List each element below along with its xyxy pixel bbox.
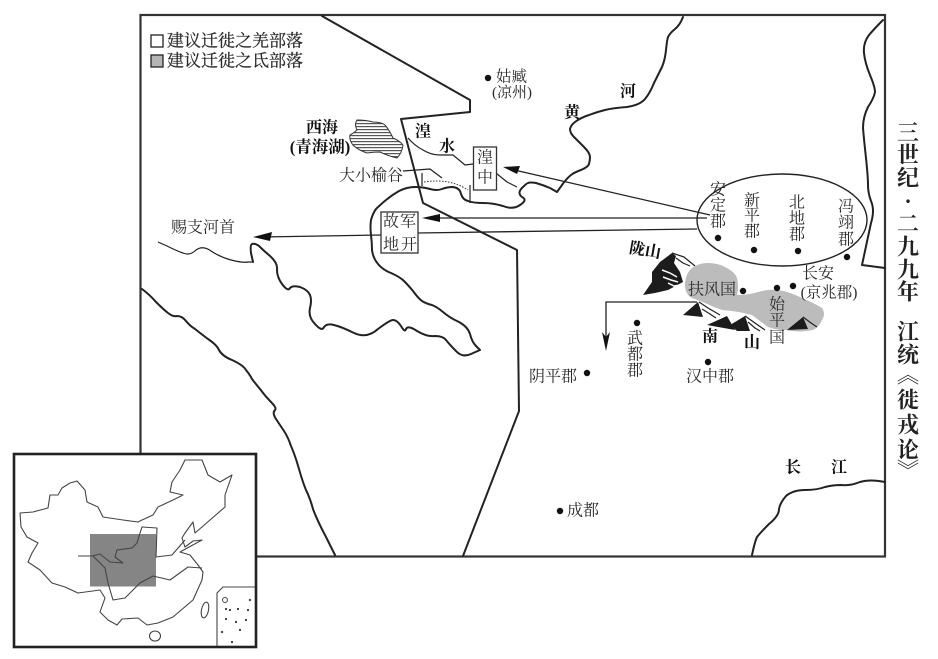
label: Fengyi: 郡 xyxy=(838,230,854,248)
China outline xyxy=(20,460,232,625)
label: Anding: 安 xyxy=(710,180,726,198)
side title: 纪 xyxy=(897,166,919,190)
label: Changan: 长安 xyxy=(802,264,834,282)
label: Shiping: 国 xyxy=(769,328,785,346)
label: Wudu xyxy=(627,320,643,380)
lake: Qinghai xyxy=(350,120,403,158)
label: Xinping xyxy=(744,192,760,253)
valley markers: Dayu Xiaoyu xyxy=(403,169,470,203)
label: Huang shui xyxy=(415,122,455,156)
label: Yangtze: 长 xyxy=(785,458,801,476)
side title: 世 xyxy=(897,142,919,168)
arrow: to Gu Junkai xyxy=(422,214,707,222)
label: Fufeng: 扶风国 xyxy=(688,280,736,298)
label: Guzang: 姑臧 xyxy=(496,68,528,86)
label: Xihai: (青海湖) xyxy=(290,136,350,156)
label: Nan Shan xyxy=(702,328,760,352)
label: Beidi: 地 xyxy=(789,208,805,228)
side title: 戎 xyxy=(897,412,919,438)
label: Nan Shan: 山 xyxy=(744,334,760,352)
arrow: to Cizhi river head xyxy=(253,229,697,241)
side title: 论 xyxy=(897,438,919,462)
label: Wudu: 郡 xyxy=(627,362,643,380)
label: Shiping: 平 xyxy=(769,312,785,330)
label: Hanzhong xyxy=(686,359,734,386)
label: Fengyi: 翊 xyxy=(838,214,854,232)
side title: 三 xyxy=(897,120,919,146)
side title: 九 xyxy=(897,234,919,260)
label: Beidi: 北 xyxy=(789,194,805,212)
label: Yangtze: 江 xyxy=(831,458,847,476)
label: Chengdu: 成都 xyxy=(567,502,599,520)
label: Yellow River xyxy=(564,82,636,122)
box: Gu Junkai di: 军 xyxy=(400,212,416,230)
ellipse: four commanderies xyxy=(697,174,867,266)
mountains: Nan Shan xyxy=(683,302,817,331)
label: Yellow River: 黄 xyxy=(564,102,582,122)
box: Huangzhong xyxy=(474,147,496,190)
label: Changan: (京兆郡) xyxy=(801,284,857,302)
Hainan xyxy=(150,631,160,641)
side title: ︽ xyxy=(897,362,919,388)
label: Xihai: 西海 xyxy=(306,118,338,136)
label: Fengyi xyxy=(838,198,854,260)
box: Huangzhong: 湟 xyxy=(477,148,493,166)
legend: 建议迁徙之羌部落 xyxy=(167,32,303,50)
Taiwan xyxy=(200,601,210,619)
box: Huangzhong: 中 xyxy=(477,168,493,186)
label: Wudu: 都 xyxy=(627,346,643,364)
South China Sea box xyxy=(217,587,255,646)
label: Shiping xyxy=(769,296,786,346)
river: Yellow River xyxy=(251,17,683,355)
inset rivers xyxy=(78,527,202,600)
side title: 统 xyxy=(897,342,920,368)
side title: 二 xyxy=(897,212,919,236)
box: Gu Junkai di: 故 xyxy=(383,212,399,230)
label: Huang shui: 水 xyxy=(439,138,455,156)
side title: · xyxy=(904,188,912,214)
label: Beidi: 郡 xyxy=(789,226,805,244)
gray area: Di tribes region xyxy=(685,263,824,332)
river: Yangtze xyxy=(752,480,885,555)
box: Gu Junkai di xyxy=(381,212,418,254)
locator rectangle xyxy=(90,534,156,586)
label: Changan xyxy=(774,264,857,302)
river: Min river west xyxy=(142,289,335,555)
box: Gu Junkai di: 地 xyxy=(383,234,399,254)
label: Anding: 定 xyxy=(710,196,726,214)
label: Dayu valley: 大小榆谷 xyxy=(339,166,403,184)
box: Gu Junkai di: 开 xyxy=(401,236,417,254)
mountain: Long Shan xyxy=(643,253,695,295)
legend: 建议迁徙之氐部落 xyxy=(167,52,303,70)
arrow: to Huangzhong xyxy=(503,166,710,215)
side title: 年 xyxy=(897,280,919,304)
label: Nan Shan: 南 xyxy=(702,328,718,346)
label: Huang shui: 湟 xyxy=(415,122,431,140)
river: Cizhi upper reach xyxy=(158,242,253,262)
river: Huang River xyxy=(408,138,473,165)
arrow: south to Wudu xyxy=(602,302,697,351)
label: Cizhi river head: 赐支河首 xyxy=(171,218,235,236)
label: Xinping: 新 xyxy=(744,192,760,210)
river: right edge river xyxy=(862,20,885,268)
border line: frontier xyxy=(322,16,519,556)
label: Yellow River: 河 xyxy=(620,82,636,100)
label: Hanzhong: 汉中郡 xyxy=(686,368,734,386)
side title: 九 xyxy=(897,258,919,282)
label: Guzang: (凉州) xyxy=(492,84,532,101)
legend xyxy=(151,32,303,70)
label: Xinping: 郡 xyxy=(744,222,760,240)
label: Yangtze xyxy=(785,458,847,476)
label: Shiping: 始 xyxy=(769,296,786,314)
label: Yinping: 阴平郡 xyxy=(529,368,577,386)
side title xyxy=(897,120,920,484)
inset: China locator map xyxy=(14,454,256,647)
label: Fengyi: 冯 xyxy=(838,198,854,216)
label: Guzang xyxy=(485,68,532,101)
river: Huang River lower xyxy=(496,173,517,187)
label: Long Shan: 陇山 xyxy=(628,238,663,262)
label: Anding: 郡 xyxy=(710,212,726,230)
side title: 徙 xyxy=(897,388,919,412)
label: Anding xyxy=(710,180,726,241)
side title: ︾ xyxy=(897,458,919,484)
panel: main map xyxy=(140,15,885,556)
label: Xinping: 平 xyxy=(744,206,760,224)
label: Beidi xyxy=(789,194,805,254)
label: Xihai xyxy=(290,118,350,156)
label: Wudu: 武 xyxy=(627,330,643,348)
side title: 江 xyxy=(897,320,919,344)
